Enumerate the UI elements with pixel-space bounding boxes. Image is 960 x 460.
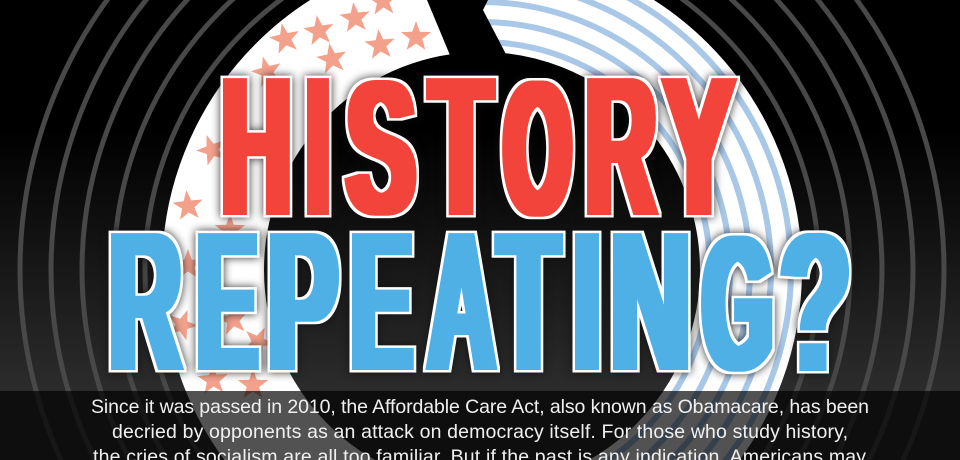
- title: HISTORY: T: [430, 36, 492, 258]
- title: REPEATING?: I: [574, 191, 600, 413]
- title: HISTORY: [222, 35, 734, 258]
- title: REPEATING?: R: [109, 192, 181, 413]
- title: REPEATING?: E: [197, 190, 257, 412]
- title: REPEATING?: E: [351, 190, 412, 412]
- title: REPEATING?: [109, 189, 850, 413]
- stars on ring: [163, 0, 431, 398]
- title: HISTORY: H: [222, 36, 291, 258]
- intro text: [91, 396, 869, 460]
- title: HISTORY: R: [586, 36, 656, 258]
- title: REPEATING?: T: [498, 191, 559, 413]
- title: REPEATING?: G: [703, 199, 772, 408]
- title: REPEATING?: P: [268, 190, 338, 413]
- title: REPEATING?: N: [611, 191, 691, 413]
- title: HISTORY: Y: [663, 35, 734, 257]
- crack gap in ring: [427, 0, 509, 60]
- blue stripes on ring: [486, 0, 794, 460]
- title: REPEATING?: A: [428, 189, 495, 412]
- title: REPEATING?: ?: [781, 194, 850, 412]
- title: HISTORY: S: [347, 43, 415, 254]
- title: HISTORY: O: [504, 43, 571, 253]
- intro text: Since it was passed in 2010, the Affordable Care Act, also known as Obamacare, has been: [91, 396, 869, 418]
- dark intro band: [0, 391, 960, 460]
- title: HISTORY: I: [306, 36, 330, 258]
- intro text: decried by opponents as an attack on democracy itself. For those who study history,: [112, 421, 848, 443]
- white broken ring: [213, 1, 751, 460]
